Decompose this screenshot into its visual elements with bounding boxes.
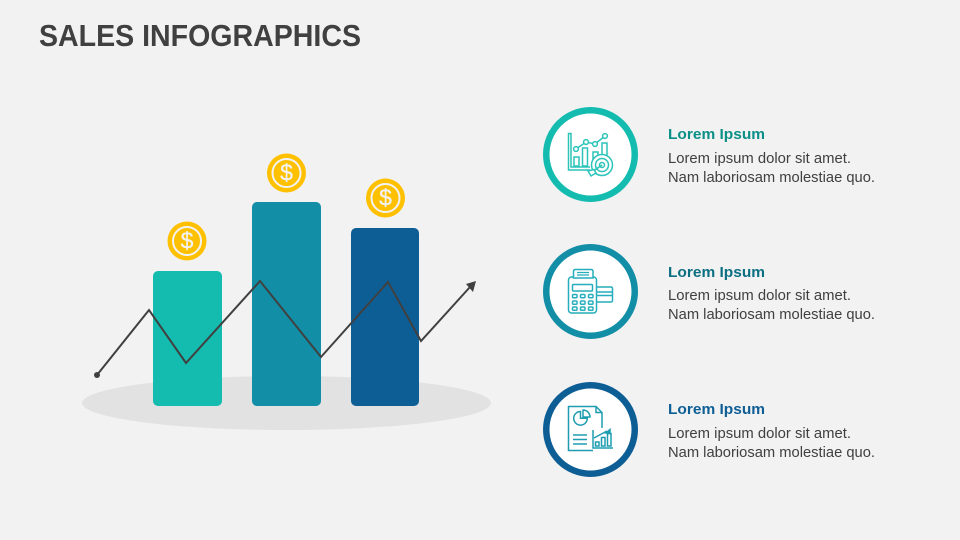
body text 2: Lorem ipsum dolor sit amet. xyxy=(668,288,851,304)
body text 1: Lorem ipsum dolor sit amet. xyxy=(668,151,851,167)
bar 1 xyxy=(153,271,222,406)
body text 3 xyxy=(668,426,875,461)
icon ring 2 xyxy=(546,247,635,336)
icon ring 3 xyxy=(546,385,635,474)
body text 2 xyxy=(668,288,875,323)
bar chart with coins and trend line xyxy=(82,154,491,430)
icon: analytics chart with target xyxy=(568,134,612,176)
ground shadow xyxy=(82,376,491,430)
panel: item 2 xyxy=(546,247,875,336)
body text 3: Nam laboriosam molestiae quo. xyxy=(668,445,875,461)
heading 1: Lorem Ipsum xyxy=(668,126,765,143)
icon: coin 2 xyxy=(267,154,306,192)
body text 1 xyxy=(668,151,875,186)
body text 1: Nam laboriosam molestiae quo. xyxy=(668,170,875,186)
bar 2 xyxy=(252,202,321,406)
heading 2: Lorem Ipsum xyxy=(668,264,765,281)
icon: coin 1 xyxy=(168,222,206,260)
icon ring 1 xyxy=(546,110,635,199)
icon: coin 1: $ xyxy=(181,228,194,254)
panel: item 1 xyxy=(546,110,875,199)
body text 3: Lorem ipsum dolor sit amet. xyxy=(668,426,851,442)
trend line arrow xyxy=(94,281,476,378)
heading 3: Lorem Ipsum xyxy=(668,401,765,418)
icon: card payment terminal xyxy=(568,270,612,313)
body text 2: Nam laboriosam molestiae quo. xyxy=(668,307,875,323)
icon: coin 2: $ xyxy=(280,160,293,186)
icon: report document with charts xyxy=(568,406,613,450)
bar 3 xyxy=(351,228,419,406)
icon: coin 3: $ xyxy=(379,184,392,210)
panel: item 3 xyxy=(546,385,875,474)
title: SALES INFOGRAPHICS xyxy=(39,19,361,53)
icon: coin 3 xyxy=(366,178,405,218)
